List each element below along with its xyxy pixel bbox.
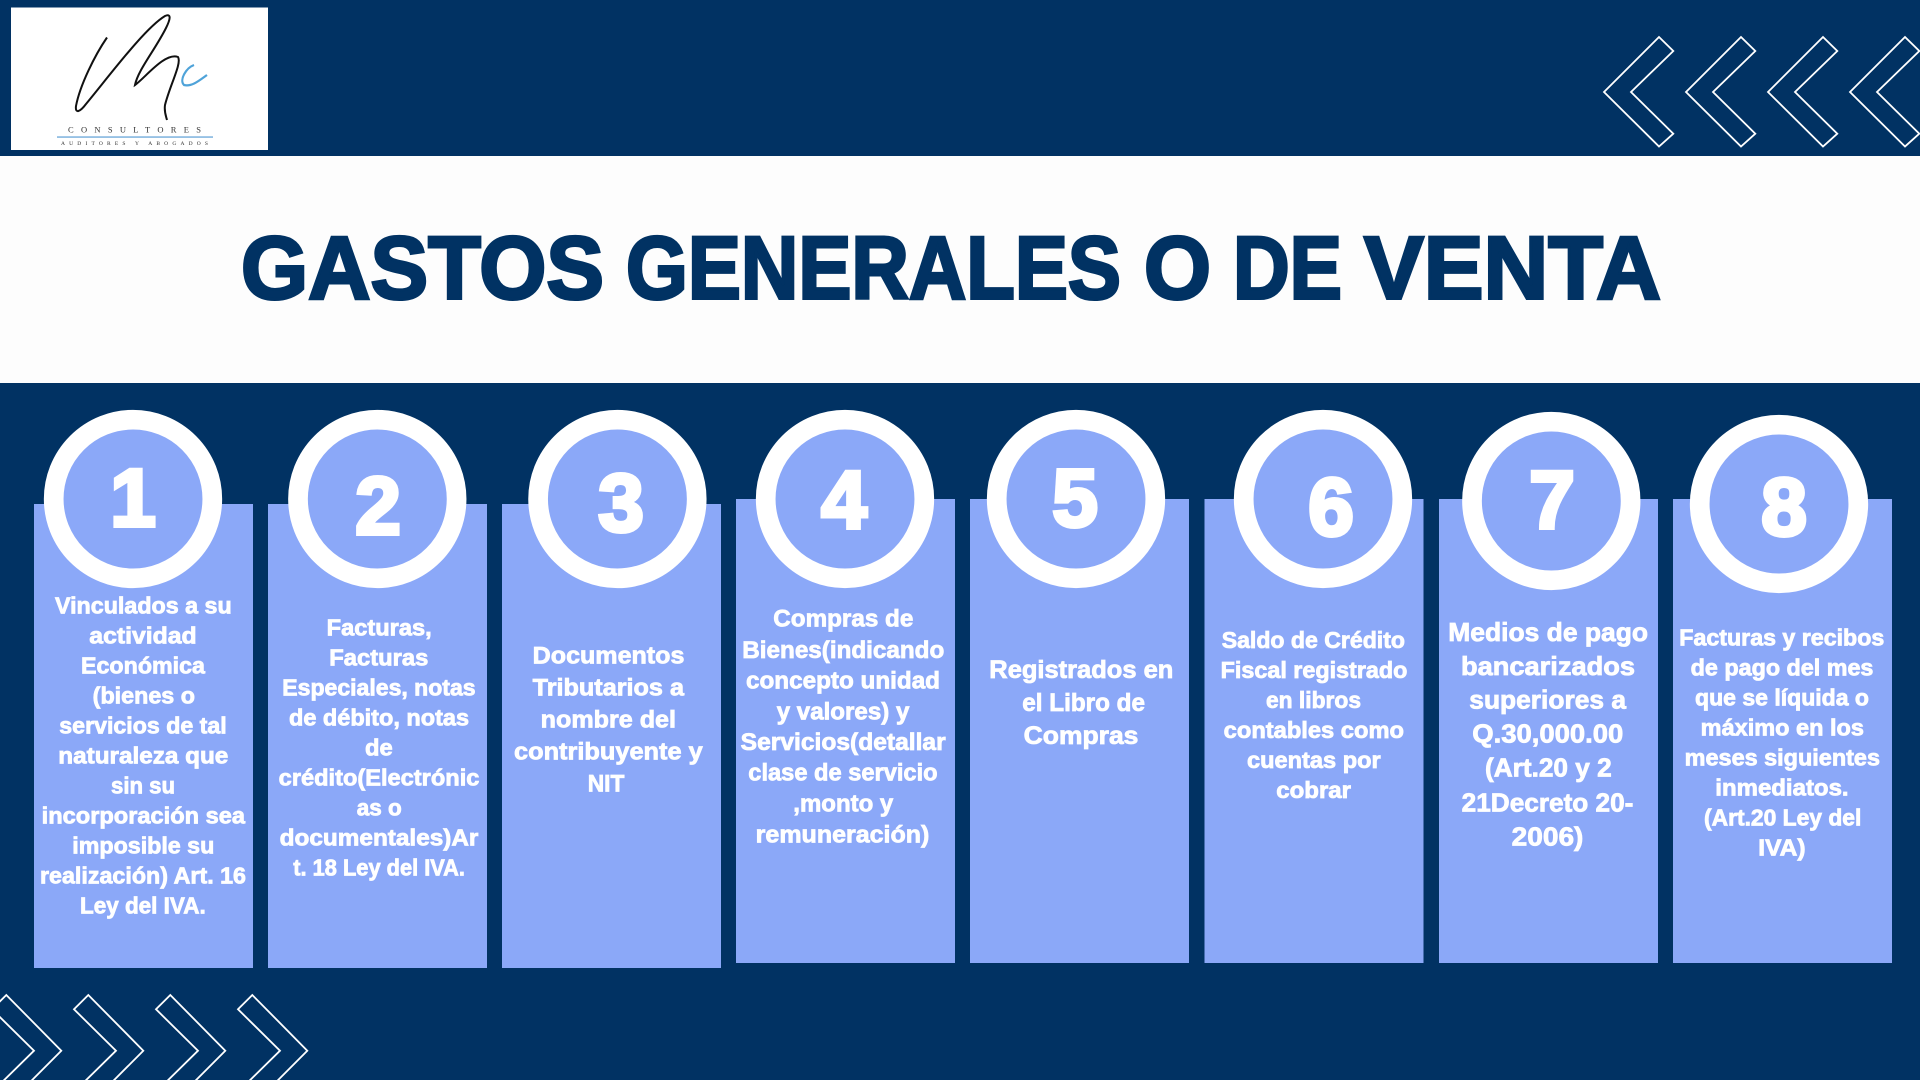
panel 1 text: (bienes o — [93, 682, 195, 708]
panel 2 text: crédito(Electrónic — [279, 764, 480, 790]
title: GENERALES — [626, 218, 1121, 318]
panel 1 text: servicios de tal — [59, 712, 227, 738]
panel 8 text: de pago del mes — [1691, 655, 1873, 681]
panel 8 text: IVA) — [1758, 835, 1806, 861]
panel 4 text: clase de servicio — [748, 760, 938, 787]
title: DE — [1233, 218, 1342, 318]
panel 8 text: máximo en los — [1701, 715, 1864, 741]
panel 4 text: remuneración) — [756, 822, 929, 849]
panel 1 text: Económica — [81, 652, 205, 678]
panel 8 text: que se líquida o — [1695, 685, 1869, 711]
panel 6 text: Saldo de Crédito — [1222, 627, 1405, 653]
title — [241, 218, 1661, 318]
logo: MC Consultores: CONSULTORES — [68, 124, 201, 134]
panel 5: 5 — [1052, 453, 1098, 544]
panel 6 text — [1221, 627, 1407, 803]
panel 2: 2 — [355, 461, 401, 552]
panel 5 — [970, 420, 1189, 963]
panel 1 text: sin su — [111, 772, 175, 798]
panel 6 text: contables como — [1224, 717, 1404, 743]
panel 8 text: Facturas y recibos — [1679, 625, 1884, 651]
panel 2 text: Especiales, notas — [282, 674, 476, 700]
panel 8 text: meses siguientes — [1685, 745, 1880, 771]
panel 3 text: nombre del — [541, 706, 676, 733]
title: VENTA — [1364, 218, 1661, 318]
panel 1 text: actividad — [89, 622, 197, 648]
panel 2 text: de débito, notas — [289, 704, 469, 730]
decorative arrows: bottom left chevrons — [0, 995, 307, 1080]
panel 2 text: de — [365, 734, 393, 760]
panel 1 text: Ley del IVA. — [80, 892, 206, 918]
title: GASTOS — [241, 218, 604, 318]
title band — [0, 156, 1920, 383]
panel 3 text: contribuyente y — [514, 739, 703, 766]
panel 4 — [736, 420, 955, 963]
panel 2 text: Facturas, — [327, 614, 432, 640]
panel 7: 7 — [1529, 455, 1575, 546]
panel 1: 1 — [110, 453, 156, 544]
panel 6 text: Fiscal registrado — [1221, 657, 1407, 683]
panel 2 text — [279, 614, 480, 880]
panel 7 text: Medios de pago — [1448, 617, 1648, 647]
panel 3: 3 — [598, 458, 644, 549]
panel 3 text: NIT — [588, 771, 624, 798]
panel 4 text: Compras de — [773, 606, 913, 633]
panel 4 text: ,monto y — [793, 791, 894, 818]
panel 5 text: Registrados en — [989, 656, 1173, 684]
panel 1 text: Vinculados a su — [55, 592, 232, 618]
panel 7 — [1439, 422, 1658, 963]
panel 6: 6 — [1308, 462, 1354, 553]
panel 3 text: Tributarios a — [533, 674, 684, 701]
panel 8 text: (Art.20 Ley del — [1704, 805, 1861, 831]
panel 2 text: documentales)Ar — [280, 824, 478, 850]
panel 6 — [1204, 420, 1424, 963]
panel 7 text: (Art.20 y 2 — [1485, 753, 1612, 783]
panel 4: 4 — [821, 455, 867, 546]
panel 5 text: Compras — [1024, 722, 1138, 750]
panel 2 — [268, 420, 487, 968]
panel 3 text: Documentos — [533, 642, 684, 669]
panel 7 text — [1448, 617, 1648, 851]
panel 8 — [1673, 425, 1892, 963]
panel 5 text — [989, 656, 1173, 750]
panel 7 text: 2006) — [1512, 821, 1583, 851]
panel 6 text: cobrar — [1276, 777, 1351, 803]
panel 4 text — [741, 606, 946, 849]
panel 4 text: Bienes(indicando — [742, 637, 944, 664]
panel 2 text: as o — [357, 794, 402, 820]
panel 7 text: 21Decreto 20- — [1462, 787, 1633, 817]
logo: MC Consultores — [11, 8, 268, 150]
logo: MC Consultores: AUDITORES Y ABOGADOS — [61, 141, 208, 147]
panel 1 — [34, 420, 253, 968]
decorative arrows: top right chevrons — [1604, 37, 1919, 146]
panel 3 — [502, 420, 721, 968]
panel 7 text: bancarizados — [1461, 651, 1635, 681]
panel 6 text: cuentas por — [1247, 747, 1381, 773]
panel 1 text: imposible su — [72, 832, 214, 858]
panel 3 text — [514, 642, 703, 798]
panel 2 text: Facturas — [329, 644, 428, 670]
panel 1 text — [40, 592, 246, 918]
panel 1 text: naturaleza que — [58, 742, 228, 768]
panel 8: 8 — [1761, 462, 1807, 553]
panel 7 text: Q.30,000.00 — [1472, 719, 1623, 749]
title: O — [1144, 218, 1211, 318]
panel 1 text: realización) Art. 16 — [40, 862, 246, 888]
panel 7 text: superiores a — [1469, 685, 1627, 715]
panel 6 text: en libros — [1266, 687, 1361, 713]
panel 1 text: incorporación sea — [42, 802, 245, 828]
panel 4 text: concepto unidad — [746, 668, 940, 695]
panel 4 text: Servicios(detallar — [741, 729, 946, 756]
panel 5 text: el Libro de — [1022, 689, 1145, 717]
panel 2 text: t. 18 Ley del IVA. — [293, 854, 465, 880]
panel 8 text — [1679, 625, 1884, 861]
panel 8 text: inmediatos. — [1715, 775, 1849, 801]
panel 4 text: y valores) y — [777, 698, 910, 725]
